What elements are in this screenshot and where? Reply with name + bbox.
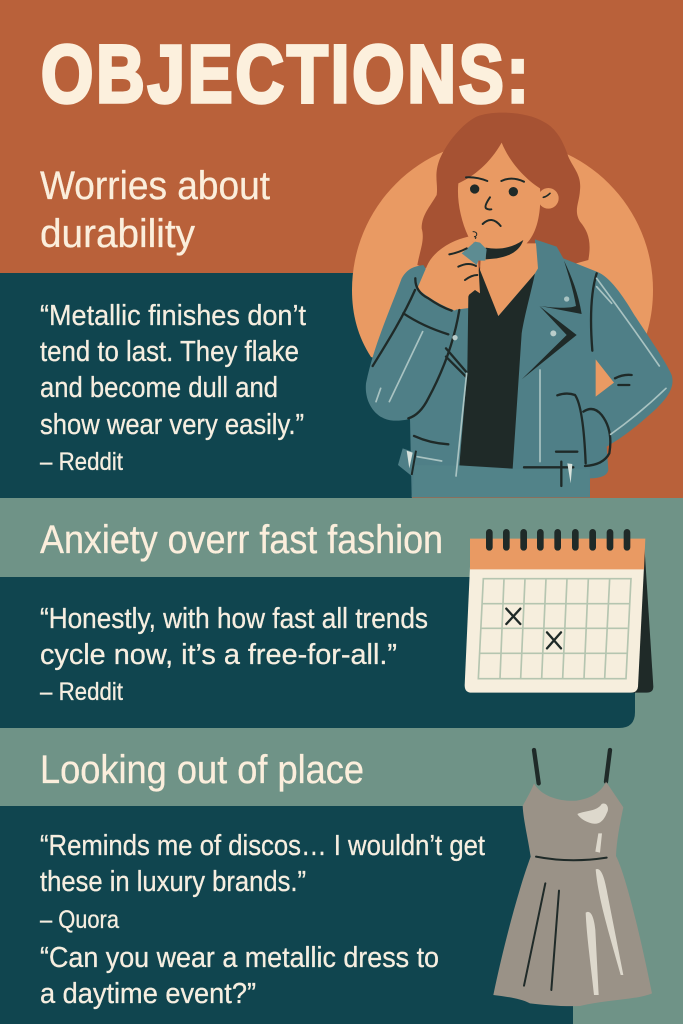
text block: durability quote: and become dull and	[40, 372, 278, 404]
hem	[412, 465, 590, 497]
ear	[538, 188, 559, 209]
collar piece held in hand	[462, 242, 487, 265]
text block: fast fashion quote: “Honestly, with how fast all trends	[40, 603, 428, 635]
text block: fast fashion quote: – Reddit	[40, 678, 123, 706]
jacket highlights	[376, 278, 666, 476]
finger lines	[449, 248, 477, 280]
text block: out of place quotes: – Quora	[40, 906, 119, 934]
dress highlights	[577, 804, 608, 824]
dress straps	[534, 750, 610, 783]
calendar back stand	[630, 540, 653, 693]
icon: peach circle behind woman	[352, 140, 653, 372]
text block: out of place quotes	[40, 830, 485, 1010]
collar line and lapel edges	[540, 261, 582, 314]
snaps	[564, 296, 569, 302]
text block: fast fashion quote	[40, 603, 428, 706]
mouth	[483, 220, 501, 226]
zipper pull right	[567, 463, 572, 483]
calendar rings	[489, 532, 627, 547]
panel: fast fashion quote background	[0, 577, 635, 728]
heading: looking out of place: Looking out of place	[40, 748, 364, 792]
panel: durability quote background	[0, 273, 412, 498]
nose	[485, 197, 491, 210]
dress waist line	[536, 857, 607, 860]
text block: durability quote: show wear very easily.”	[40, 409, 304, 441]
eyes	[470, 184, 479, 194]
neck and chest skin	[480, 243, 538, 316]
icon: metallic dress	[493, 750, 652, 1006]
text block: durability quote: – Reddit	[40, 448, 123, 476]
jacket dark seams	[373, 278, 466, 444]
text block: out of place quotes: “Can you wear a metallic dress to	[40, 942, 439, 974]
jacket right side and sleeve	[473, 239, 673, 497]
panel: out of place quote background	[0, 806, 573, 1024]
calendar grid	[478, 579, 631, 679]
face	[458, 143, 540, 251]
title: OBJECTIONS:	[41, 28, 529, 119]
text block: durability quote: “Metallic finishes don’t	[40, 300, 306, 332]
jacket left side and sleeve	[366, 265, 480, 497]
dress body	[493, 782, 652, 1006]
right side seams and pocket	[524, 273, 632, 486]
text block: out of place quotes: these in luxury brands.”	[40, 866, 306, 898]
gap between arm and body	[596, 359, 614, 397]
pocket tab	[398, 448, 417, 476]
text block: fast fashion quote: cycle now, it’s a free-for-all.”	[40, 639, 397, 671]
text block: out of place quotes: a daytime event?”	[40, 978, 256, 1010]
text block: durability quote: tend to last. They flake	[40, 336, 299, 368]
heading: worries about durability: Worries about	[40, 164, 270, 208]
illustration: woman in teal jacket	[366, 113, 673, 497]
text block: durability quote	[40, 300, 306, 476]
heading: anxiety over fast fashion: Anxiety overr fast fashion	[40, 518, 443, 562]
hand	[417, 237, 480, 311]
text block: out of place quotes: “Reminds me of discos… I wouldn’t get	[40, 830, 485, 862]
zipper pull left	[407, 451, 413, 468]
dress pleats	[524, 883, 559, 990]
calendar page	[465, 567, 644, 693]
heading: worries about durability: durability	[40, 212, 195, 256]
panel: terracotta header	[0, 0, 683, 498]
eyebrows	[466, 177, 487, 181]
heading: worries about durability	[40, 164, 270, 256]
calendar orange header	[470, 539, 645, 569]
black top	[459, 267, 535, 469]
icon: calendar	[465, 532, 653, 693]
calendar crosses	[506, 609, 561, 648]
thumb detail	[473, 232, 477, 239]
shadow under chin	[486, 240, 523, 259]
hair	[417, 113, 590, 273]
